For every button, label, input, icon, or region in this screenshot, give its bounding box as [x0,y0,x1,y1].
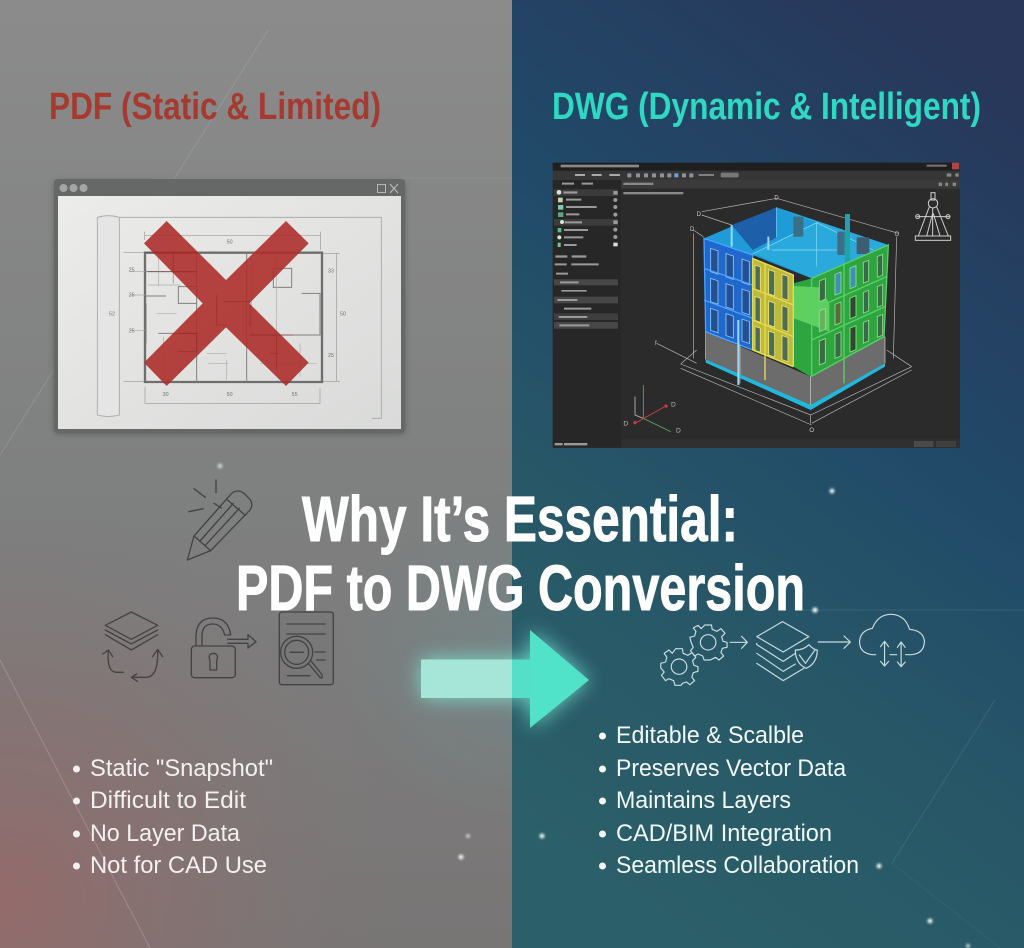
panel: left background [0,0,512,948]
floor plan drawing: 52 [109,311,115,317]
blue wing [704,238,753,350]
icon: pencil [187,480,252,560]
axis gizmo: D [676,428,681,435]
floor plan drawing: 50 [227,239,233,245]
panel: PDF document window [54,179,405,434]
floor plan drawing: 33 [328,268,334,274]
CAD side panel [553,180,621,447]
text block: DWG benefits [599,722,859,879]
icon: layers with check [757,622,850,681]
floor plan drawing: 30 [163,392,169,398]
text block: DWG benefits: Maintains Layers [616,787,791,814]
CAD title and tool bars [553,163,960,194]
floor plan drawing: 25 [129,328,135,334]
yellow wing [753,258,793,367]
3D building model [655,195,912,434]
title [236,483,805,624]
text block: PDF limitations: No Layer Data [90,820,241,847]
floor plan drawing: 50 [227,392,233,398]
text block: DWG benefits: Seamless Collaboration [616,852,859,879]
title: PDF to DWG Conversion [236,552,805,624]
3D building model: D [895,232,900,238]
compass icon [915,193,951,240]
title: Why It’s Essential: [302,483,738,555]
text block: DWG benefits: Editable & Scalble [616,722,804,749]
icon: cloud with transfer arrows [860,614,924,667]
icon: document with magnifier [279,612,333,685]
heading: PDF: PDF (Static & Limited) [49,86,381,128]
floor plan drawing: 25 [129,293,135,299]
roof [704,207,888,278]
text block: PDF limitations: Not for CAD Use [90,852,267,879]
arrow [421,630,589,728]
axis gizmo [623,385,681,435]
icon: layers with cycle [103,612,163,681]
floor plan drawing [97,216,381,418]
axis gizmo: D [623,420,628,427]
floor plan drawing: 55 [292,392,298,398]
text block: DWG benefits: Preserves Vector Data [616,755,847,782]
3D building model: D [774,195,779,201]
panel: right background [512,0,1024,948]
3D building model: D [690,227,695,233]
text block: PDF limitations: Static "Snapshot" [90,755,273,782]
green wing [793,245,888,377]
floor plan drawing: 25 [129,268,135,274]
3D building model: O [809,428,814,434]
icon: open padlock with arrow [191,618,256,678]
text block: PDF limitations: Difficult to Edit [90,787,246,814]
text block: DWG benefits: CAD/BIM Integration [616,820,832,847]
text block: PDF limitations [73,755,273,879]
axis gizmo: D [671,402,676,409]
gray base [706,332,885,408]
3D building model: f [655,341,657,347]
floor plan drawing: 50 [340,311,346,317]
decorative sparkles [218,464,970,948]
icon: gears [661,625,747,685]
floor plan drawing: 25 [328,353,334,359]
3D building model: D [697,212,702,218]
panel: CAD software window [553,163,960,448]
